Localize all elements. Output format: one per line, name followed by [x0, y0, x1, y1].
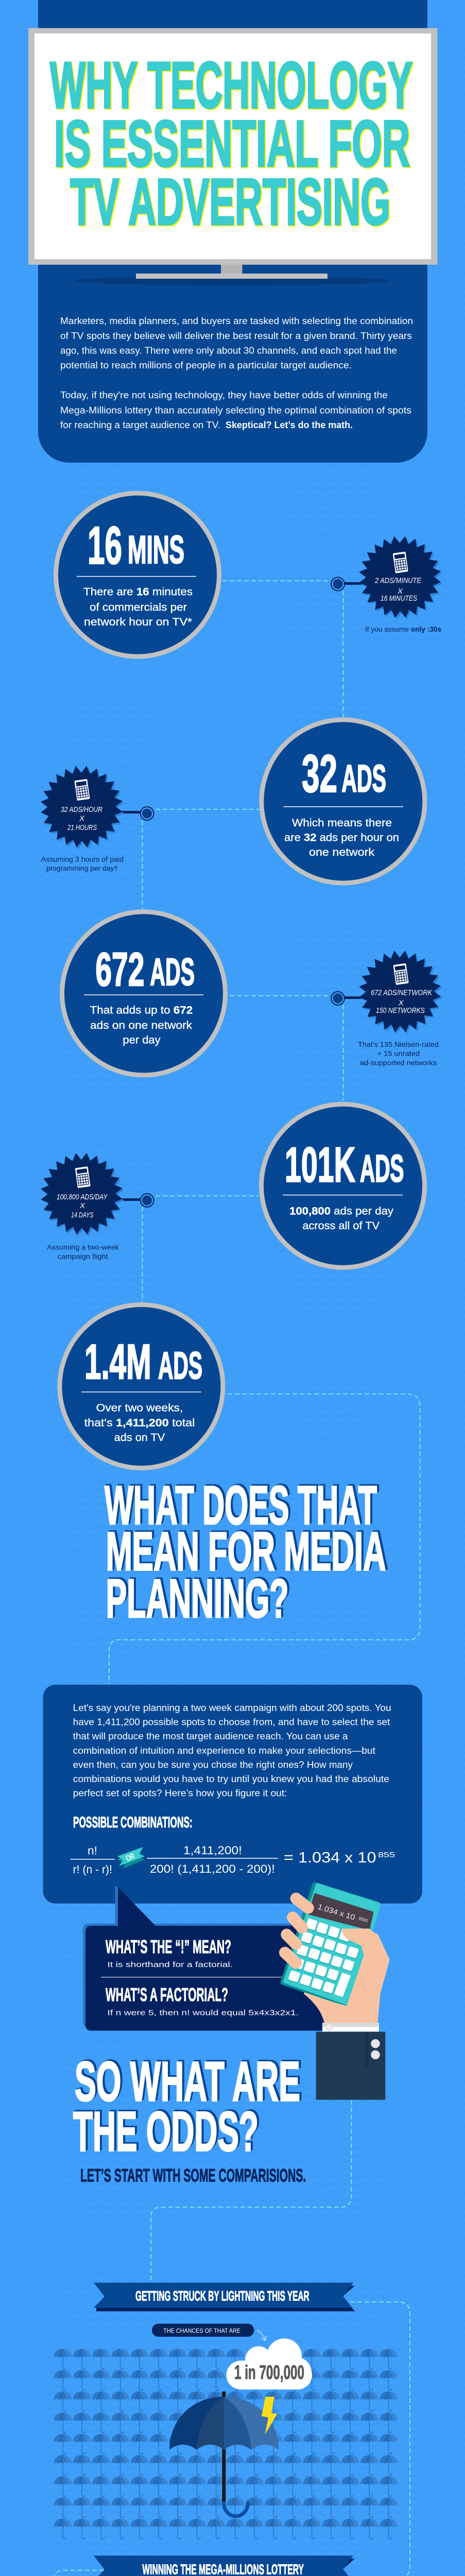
stat circle: 672 ads: [62, 912, 226, 1075]
stat circle: 32 ads: one network: [309, 846, 375, 858]
intro text: potential to reach millions of people in a particular target audience.: [60, 360, 352, 370]
cloud with odds: [227, 2338, 312, 2389]
ribbon: lottery: [94, 2555, 355, 2576]
intro text: Mega-Millions lottery than accurately selecting the optimal combination of spots: [60, 405, 411, 415]
formula: general: [71, 1844, 115, 1876]
heading: so what are the odds: THE ODDS?: [73, 2100, 259, 2163]
stat circle: 1.4M ads: ADS: [158, 1344, 202, 1387]
formula: result: = 1.034 x 10: [284, 1850, 376, 1866]
stat circle: 1.4M ads: [60, 1304, 223, 1468]
calculation burst: 672 ads per network: X: [398, 998, 404, 1008]
heading: so what are the odds: SO WHAT ARE: [75, 2050, 300, 2113]
icon: hand holding calculator: 1.034 x 10: [317, 1903, 356, 1922]
heading: what does that mean for media planning: [105, 1475, 386, 1629]
calculation burst: 2 ads per minute: 2 ADS/MINUTE: [374, 577, 422, 585]
intro text: ago, this was easy. There were only about 30 channels, and each spot had the: [60, 345, 397, 355]
intro text: Marketers, media planners, and buyers are tasked with selecting the combination: [60, 316, 413, 326]
intro text: Skeptical? Let’s do the math.: [226, 420, 353, 430]
ribbon: lightning: [94, 2283, 355, 2311]
panel: possible combinations: that will produce the most target audience reach. You can use a: [73, 1731, 349, 1741]
stat circle: 16 mins: of commercials per: [90, 601, 187, 613]
heading: what does that mean for media planning: PLANNING?: [106, 1568, 289, 1629]
formula: result: 1,411,200!: [183, 1844, 242, 1857]
stat circle: 16 mins: network hour on TV*: [84, 616, 192, 628]
title: [50, 48, 412, 239]
icon: television with title: [28, 28, 438, 285]
ribbon: lightning: GETTING STRUCK BY LIGHTNING THIS YEAR: [135, 2289, 309, 2304]
calculation burst: 100,800 ads per day: Assuming a two-week: [47, 1243, 119, 1251]
subheading: comparisons: LET’S START WITH SOME COMPARISIONS.: [80, 2165, 306, 2185]
calculation burst: 672 ads per network: ad-supported networks: [360, 1058, 437, 1066]
formula: general: r! (n - r)!: [73, 1863, 112, 1876]
intro text: of TV spots they believe will deliver the best result for a given brand. Thirty years: [60, 331, 412, 341]
panel: possible combinations: Let's say you're planning a two week campaign with about 200 spots. You: [73, 1703, 391, 1713]
umbrella grid: [53, 2349, 398, 2540]
heading: so what are the odds: [73, 2050, 300, 2163]
stat circle: 16 mins: There are 16 minutes: [83, 586, 193, 598]
stat circle: 32 ads: Which means there: [292, 817, 392, 829]
chance pill: lightning: [152, 2324, 266, 2341]
stat circle: 1.4M ads: ads on TV: [114, 1432, 165, 1444]
stat circle: 101K ads: 101K: [285, 1138, 355, 1193]
icon: large umbrella: [169, 2392, 279, 2516]
intro text: [60, 316, 413, 430]
calculation burst: 32 ads per hour: X: [79, 814, 85, 823]
stat circle: 672 ads: ads on one network: [90, 1020, 193, 1031]
stat circle: 101K ads: ADS: [360, 1147, 404, 1190]
calculation burst: 672 ads per network: + 15 unrated: [377, 1049, 420, 1058]
panel: possible combinations: perfect set of spots? Here’s how you figure it out:: [73, 1788, 287, 1798]
stat circle: 672 ads: ADS: [150, 951, 195, 993]
stat circle: 672 ads: per day: [123, 1035, 161, 1046]
stat circle: 672 ads: 672: [95, 943, 144, 996]
panel: possible combinations: combinations would you have to try until you knew you had the absolute: [73, 1774, 389, 1784]
calculation burst: 32 ads per hour: Assuming 3 hours of paid: [41, 855, 124, 863]
callout: factorial explainer: It is shorthand for a factorial.: [107, 1960, 233, 1969]
formula: or ribbon: OR: [125, 1852, 136, 1863]
calculation burst: 100,800 ads per day: [36, 1148, 154, 1260]
stat circle: 16 mins: 16: [88, 516, 122, 575]
calculation burst: 100,800 ads per day: X: [79, 1201, 85, 1210]
calculation burst: 672 ads per network: That's 135 Nielsen-rated: [358, 1040, 439, 1048]
calculation burst: 100,800 ads per day: 14 DAYS: [71, 1211, 93, 1219]
calculation burst: 32 ads per hour: programming per day†: [46, 864, 118, 872]
stat circle: 672 ads: That adds up to 672: [90, 1005, 193, 1016]
intro text: Today, if they're not using technology, they have better odds of winning the: [60, 390, 388, 400]
calculation burst: 2 ads per minute: [331, 531, 447, 633]
calculation burst: 2 ads per minute: If you assume only :30s: [365, 625, 441, 633]
calculation burst: 32 ads per hour: 21 HOURS: [67, 823, 97, 832]
stat circle: 32 ads: are 32 ads per hour on: [284, 832, 399, 844]
calculation burst: 100,800 ads per day: campaign flight: [58, 1252, 108, 1260]
panel: possible combinations: have 1,411,200 possible spots to choose from, and have to select the set: [73, 1717, 390, 1727]
calculation burst: 32 ads per hour: [36, 761, 154, 872]
icon: hand holding calculator: [282, 1884, 390, 2100]
formula: result: 855: [378, 1851, 395, 1859]
stat circle: 32 ads: [262, 720, 425, 883]
calculation burst: 2 ads per minute: 16 MINUTES: [381, 594, 417, 603]
stat circle: 101K ads: [262, 1104, 424, 1267]
icon: lightning bolt: [262, 2397, 277, 2435]
calculation burst: 672 ads per network: 672 ADS/NETWORK: [371, 988, 433, 997]
calculation burst: 672 ads per network: [331, 945, 447, 1066]
panel: possible combinations: even then, can you be sure you chose the right ones? How many: [73, 1759, 353, 1770]
chance pill: lightning: THE CHANCES OF THAT ARE: [163, 2328, 240, 2334]
stat circle: 101K ads: 100,800 ads per day: [289, 1205, 394, 1217]
stat circle: 32 ads: ADS: [341, 757, 386, 800]
calculation burst: 672 ads per network: 150 NETWORKS: [376, 1006, 425, 1015]
formula: general: n!: [88, 1844, 97, 1857]
cloud with odds: 1 in 700,000: [234, 2362, 304, 2384]
stat circle: 101K ads: across all of TV: [302, 1220, 380, 1232]
intro panel: [38, 0, 427, 463]
stat circle: 16 mins: MINS: [128, 528, 184, 572]
formula heading: POSSIBLE COMBINATIONS:: [73, 1814, 193, 1831]
formula: or ribbon: [117, 1847, 145, 1869]
stat circle: 32 ads: 32: [302, 744, 337, 803]
stat circle: 16 mins: [56, 493, 219, 656]
icon: hand holding calculator: 855: [358, 1916, 369, 1923]
intro text: for reaching a target audience on TV.: [60, 420, 220, 430]
callout: factorial explainer: If n were 5, then n! would equal 5x4x3x2x1.: [107, 2009, 299, 2018]
calculation burst: 100,800 ads per day: 100,800 ADS/DAY: [57, 1193, 108, 1201]
callout: factorial explainer: WHAT’S THE “!” MEAN?: [106, 1936, 231, 1957]
formula: result: 200! (1,411,200 - 200)!: [150, 1862, 275, 1875]
panel: possible combinations: combination of intuition and experience to make your selections—but: [73, 1745, 375, 1756]
panel: possible combinations: [43, 1685, 422, 1904]
formula: result: [147, 1844, 395, 1875]
dashed connector path through stats: [109, 581, 420, 1684]
dashed connectors through comparisons: [54, 2100, 410, 2576]
callout: factorial explainer: WHAT’S A FACTORIAL?: [106, 1984, 228, 2005]
stat circle: 1.4M ads: that's 1,411,200 total: [84, 1417, 195, 1429]
calculation burst: 2 ads per minute: X: [397, 587, 403, 596]
stat circle: 1.4M ads: Over two weeks,: [96, 1402, 183, 1414]
callout: factorial explainer: [83, 1886, 330, 2031]
calculation burst: 32 ads per hour: 32 ADS/HOUR: [61, 805, 102, 814]
stat circle: 1.4M ads: 1.4M: [84, 1334, 151, 1389]
